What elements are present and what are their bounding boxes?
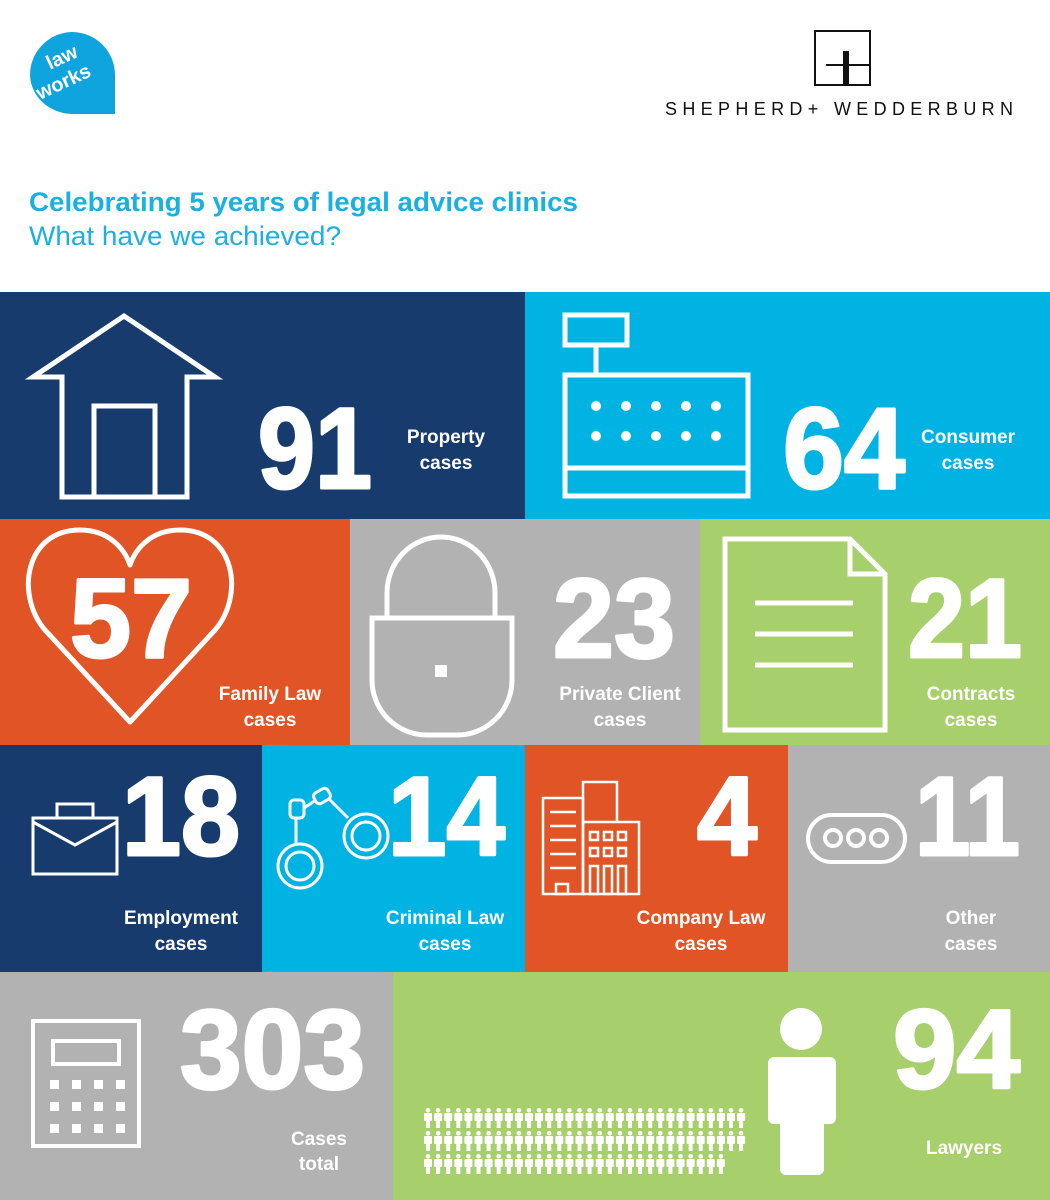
panel: lawyers: 94 [893, 987, 1020, 1112]
icon: large person [768, 1008, 836, 1175]
panel: employment: Employment [124, 908, 239, 929]
panel: family law: Family Law [219, 684, 321, 705]
icon: ellipsis pill [808, 815, 905, 862]
panel: lawyers: Lawyers [926, 1138, 1002, 1159]
title [29, 187, 578, 251]
panel: contracts [700, 519, 1050, 745]
panel: company law: 4 [697, 754, 757, 879]
logo: lawworks: law [43, 41, 82, 75]
panel: consumer: Consumer [921, 427, 1016, 448]
panel: contracts: cases [945, 710, 997, 731]
title: What have we achieved? [29, 221, 341, 251]
panel: private client: 23 [553, 556, 675, 681]
panel: property [0, 292, 525, 519]
panel: family law: cases [244, 710, 296, 731]
panel: total cases: Cases [291, 1129, 347, 1150]
icon: crowd of 94 figures [424, 1108, 745, 1174]
panel: lawyers [393, 972, 1050, 1200]
icon: handcuffs [278, 787, 388, 888]
panel: criminal law: cases [419, 934, 471, 955]
panel: other: 11 [915, 754, 1020, 879]
logo: lawworks [30, 32, 115, 114]
panel: family law: 57 [70, 556, 192, 681]
logo: shepherd wedderburn: SHEPHERD+ WEDDERBURN [665, 99, 1013, 119]
title: Celebrating 5 years of legal advice clinics [29, 187, 578, 217]
panel: consumer: cases [942, 453, 994, 474]
panel: employment: 18 [122, 754, 240, 879]
panel: property: cases [420, 453, 472, 474]
panel: private client: cases [594, 710, 646, 731]
panel: property: Property [407, 427, 485, 448]
panel: private client [350, 519, 700, 745]
icon: house [33, 316, 215, 497]
panel: total cases: 303 [180, 987, 365, 1112]
panel: consumer: 64 [783, 385, 905, 513]
panel: criminal law: Criminal Law [386, 908, 504, 929]
panel: other [788, 745, 1050, 972]
panel: total cases: total [299, 1154, 339, 1175]
panel: employment: cases [155, 934, 207, 955]
icon: heart [28, 530, 232, 722]
icon: briefcase [33, 804, 117, 874]
panel: other: Other [946, 908, 997, 929]
icon: cash register [565, 315, 748, 496]
panel: total cases [0, 972, 393, 1200]
panel: family law [0, 519, 350, 745]
panel: company law: Company Law [637, 908, 766, 929]
icon: padlock [372, 537, 512, 735]
icon: document [725, 539, 885, 730]
panel: property: 91 [258, 385, 372, 513]
panel: other: cases [945, 934, 997, 955]
panel: contracts: 21 [908, 556, 1022, 681]
panel: private client: Private Client [559, 684, 681, 705]
panel: company law: cases [675, 934, 727, 955]
panel: criminal law [262, 745, 525, 972]
panel: contracts: Contracts [927, 684, 1015, 705]
icon: calculator [33, 1021, 139, 1146]
logo: lawworks: works [32, 60, 95, 105]
panel: consumer [525, 292, 1050, 519]
panel: company law [525, 745, 788, 972]
logo: shepherd wedderburn [665, 31, 1013, 119]
panel: employment [0, 745, 262, 972]
icon: buildings [543, 782, 639, 894]
panel: criminal law: 14 [388, 754, 505, 879]
